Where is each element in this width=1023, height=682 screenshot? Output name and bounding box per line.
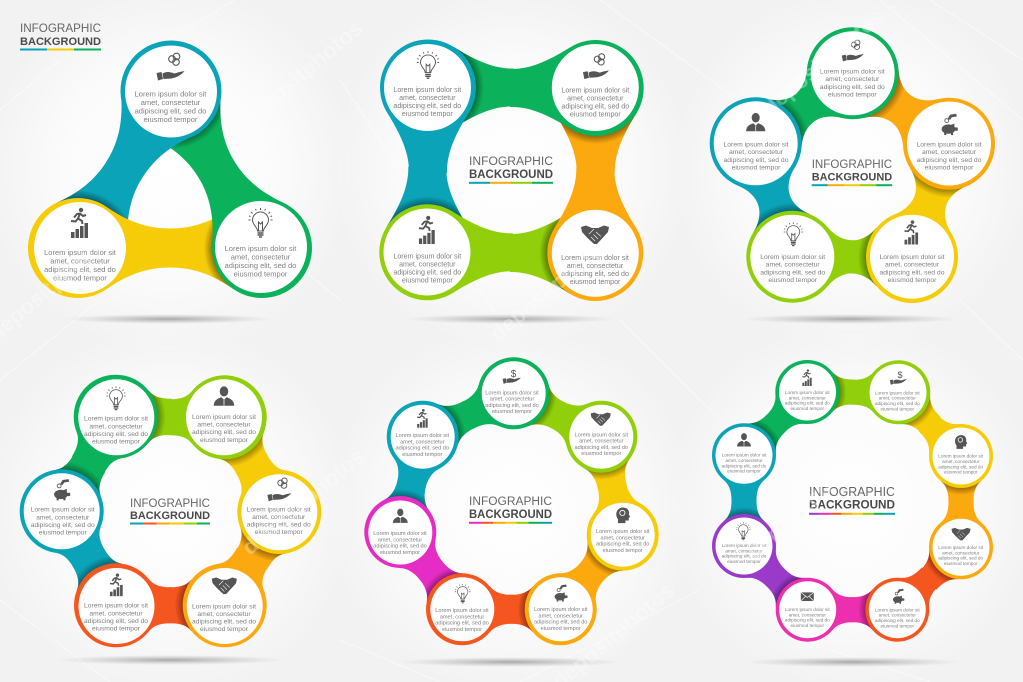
text: upper right circle: amet, consectetur <box>579 439 624 445</box>
coloured rings <box>28 40 312 298</box>
text: left circle: eiusmod tempor <box>53 274 107 282</box>
icon: runner on bars <box>802 369 812 386</box>
coloured rings <box>710 27 995 303</box>
text: top right circle: eiusmod tempor <box>200 437 249 444</box>
step: left circle <box>34 202 126 294</box>
text: top left circle: adipiscing elit, sed do <box>785 401 830 406</box>
text: top circle: adipiscing elit, sed do <box>820 84 885 91</box>
connectors entering the next circle <box>57 95 253 289</box>
text: bottom right circle: amet, consectetur <box>879 613 916 618</box>
text: top left circle: eiusmod tempor <box>402 110 453 118</box>
panel: seven step diagram <box>364 357 659 667</box>
text: lower left circle: eiusmod tempor <box>442 627 482 633</box>
text: top left circle: eiusmod tempor <box>92 438 141 446</box>
coloured rings <box>379 40 644 301</box>
coloured rings <box>364 357 659 645</box>
step: top right circle <box>186 379 262 455</box>
text: top circle: adipiscing elit, sed do <box>485 403 539 409</box>
text: lower left circle: amet, consectetur <box>725 548 763 553</box>
centre title: INFOGRAPHIC <box>809 485 895 499</box>
icon: runner on bars <box>904 220 918 244</box>
text: right circle: amet, consectetur <box>922 149 977 156</box>
step: right circle <box>591 503 655 567</box>
centre title: INFOGRAPHIC <box>130 496 210 510</box>
text: bottom right circle: Lorem ipsum dolor sit <box>880 254 945 261</box>
text: top left circle: Lorem ipsum dolor sit <box>84 416 148 423</box>
floor shadow <box>405 314 615 324</box>
text: top circle: Lorem ipsum dolor sit <box>485 390 539 396</box>
text: upper left circle: eiusmod tempor <box>727 469 761 474</box>
text: top left circle: adipiscing elit, sed do <box>393 102 461 110</box>
text: top left circle: amet, consectetur <box>399 94 456 102</box>
floor shadow <box>63 314 273 324</box>
text: right circle: eiusmod tempor <box>603 548 643 554</box>
text: bottom left circle: amet, consectetur <box>766 262 820 269</box>
step: top right circle <box>552 44 639 131</box>
step: bottom right circle <box>552 210 639 297</box>
text: top right circle: Lorem ipsum dolor sit <box>875 390 920 395</box>
icon: head with gear <box>955 435 967 449</box>
text: top left circle: amet, consectetur <box>789 395 826 400</box>
text: right circle: eiusmod tempor <box>255 529 303 536</box>
text: bottom left circle: eiusmod tempor <box>402 276 453 284</box>
text: left circle: Lorem ipsum dolor sit <box>724 141 789 148</box>
icon: runner on bars <box>419 216 435 244</box>
text: bottom right circle: Lorem ipsum dolor sit <box>561 254 629 262</box>
icon: handshake <box>951 528 971 540</box>
text: bottom left circle: adipiscing elit, sed do <box>84 618 148 625</box>
text: right circle: eiusmod tempor <box>234 270 288 278</box>
step: left circle <box>24 473 100 549</box>
text: left circle: Lorem ipsum dolor sit <box>44 248 117 257</box>
text: left circle: amet, consectetur <box>378 537 422 543</box>
floor shadow <box>55 655 285 665</box>
text: upper right circle: adipiscing elit, sed do <box>575 445 628 451</box>
text: bottom left circle: amet, consectetur <box>399 260 456 268</box>
text: upper left circle: adipiscing elit, sed do <box>722 463 767 468</box>
text: right circle: adipiscing elit, sed do <box>247 522 311 529</box>
text: bottom left circle: Lorem ipsum dolor sit <box>785 607 830 612</box>
coloured rings <box>20 375 321 647</box>
centre title: BACKGROUND <box>469 168 553 181</box>
icon: light bulb <box>106 386 126 410</box>
text: lower right circle: eiusmod tempor <box>944 561 978 566</box>
icon: runner on bars <box>110 574 123 596</box>
step: top left circle <box>384 44 471 131</box>
text: bottom right circle: eiusmod tempor <box>880 623 915 628</box>
step: upper right circle <box>932 428 990 484</box>
text: top right circle: amet, consectetur <box>879 396 916 401</box>
icon: hand with coins <box>156 53 184 80</box>
text: right circle: amet, consectetur <box>231 252 291 262</box>
title <box>20 21 101 50</box>
centre title: BACKGROUND <box>130 510 210 522</box>
step: left circle <box>714 101 798 185</box>
text: top circle: Lorem ipsum dolor sit <box>135 90 207 98</box>
text: bottom left circle: amet, consectetur <box>89 610 143 617</box>
text: left circle: amet, consectetur <box>50 256 110 266</box>
centre title <box>812 157 893 186</box>
floor shadow <box>745 657 961 667</box>
panel: five step diagram <box>710 27 995 324</box>
text: lower right circle: Lorem ipsum dolor sit <box>534 607 588 613</box>
watermark: depositphotos <box>757 3 889 120</box>
text: upper right circle: Lorem ipsum dolor sit <box>575 432 628 438</box>
text: bottom right circle: amet, consectetur <box>567 262 624 270</box>
connectors leaving each circle <box>56 391 285 631</box>
step: bottom right circle <box>187 568 263 644</box>
text: top left circle: Lorem ipsum dolor sit <box>785 390 830 395</box>
text: bottom right circle: Lorem ipsum dolor sit <box>875 607 920 612</box>
connectors leaving each circle <box>738 70 959 286</box>
icon: light bulb <box>455 584 470 603</box>
step: lower right circle <box>932 519 990 576</box>
text: top right circle: adipiscing elit, sed do <box>561 102 629 110</box>
text: top left circle: Lorem ipsum dolor sit <box>393 86 461 94</box>
icon: hand with dollar: $ <box>897 370 903 380</box>
icon: businessman <box>393 509 408 523</box>
text: top right circle: eiusmod tempor <box>880 406 915 411</box>
watermark: depositphotos <box>235 15 367 132</box>
centre title <box>469 154 553 184</box>
text: top circle: amet, consectetur <box>490 397 534 403</box>
icon: light bulb <box>417 51 439 78</box>
text: top left circle: eiusmod tempor <box>790 406 825 411</box>
text: right circle: adipiscing elit, sed do <box>916 157 982 164</box>
text: left circle: adipiscing elit, sed do <box>31 522 95 529</box>
text: left circle: adipiscing elit, sed do <box>724 157 789 164</box>
text: top right circle: amet, consectetur <box>197 422 251 429</box>
text: lower left circle: adipiscing elit, sed do <box>722 554 767 559</box>
icon: hand with dollar: $ <box>511 369 517 380</box>
icon: runner on bars <box>417 409 428 428</box>
text: top circle: eiusmod tempor <box>828 92 877 98</box>
text: upper left circle: Lorem ipsum dolor sit <box>396 433 449 439</box>
step: top circle <box>811 31 895 115</box>
text: top left circle: amet, consectetur <box>89 423 143 430</box>
icon: light bulb <box>248 208 272 237</box>
text: bottom left circle: Lorem ipsum dolor sit <box>84 603 148 610</box>
text: bottom right circle: eiusmod tempor <box>570 278 621 286</box>
text: top circle: adipiscing elit, sed do <box>135 106 206 116</box>
step: bottom right circle <box>869 581 926 638</box>
connectors entering the next circle <box>723 371 982 630</box>
step: right circle <box>215 201 307 293</box>
icon: businessman <box>214 386 234 406</box>
step: lower left circle <box>430 577 494 641</box>
icon: hand with coins <box>583 54 609 79</box>
connectors entering the next circle <box>56 391 285 631</box>
icon: businessman <box>746 113 765 131</box>
text: right circle: Lorem ipsum dolor sit <box>225 244 297 253</box>
text: left circle: adipiscing elit, sed do <box>44 265 116 274</box>
text: bottom right circle: adipiscing elit, sed do <box>880 269 945 276</box>
text: right circle: amet, consectetur <box>252 514 306 521</box>
icon: envelope <box>801 592 814 601</box>
step: top circle <box>482 361 546 425</box>
text: top right circle: eiusmod tempor <box>570 110 621 118</box>
floor shadow <box>742 314 958 324</box>
text: lower left circle: Lorem ipsum dolor sit <box>435 608 489 614</box>
centre title: INFOGRAPHIC <box>469 154 553 168</box>
icon: light bulb <box>784 222 803 246</box>
icon: light bulb <box>736 522 750 540</box>
step: bottom left circle <box>750 215 834 299</box>
step: left circle <box>368 500 432 564</box>
text: lower right circle: adipiscing elit, sed do <box>534 620 587 626</box>
text: upper right circle: eiusmod tempor <box>944 470 978 475</box>
centre title: BACKGROUND <box>809 498 895 512</box>
icon: businessman <box>737 433 751 446</box>
text: bottom right circle: eiusmod tempor <box>200 626 249 633</box>
floor shadow <box>398 657 622 667</box>
text: left circle: adipiscing elit, sed do <box>373 544 427 550</box>
text: top circle: Lorem ipsum dolor sit <box>820 68 885 75</box>
title: INFOGRAPHIC <box>20 21 101 35</box>
text: bottom left circle: eiusmod tempor <box>768 277 818 284</box>
text: top circle: amet, consectetur <box>825 76 880 83</box>
text: lower right circle: eiusmod tempor <box>541 626 581 632</box>
text: lower right circle: amet, consectetur <box>538 613 583 619</box>
text: lower left circle: eiusmod tempor <box>727 559 761 564</box>
text: lower right circle: amet, consectetur <box>942 550 980 555</box>
text: bottom right circle: adipiscing elit, sed do <box>561 270 629 278</box>
icon: hand with coins <box>842 40 864 61</box>
connectors leaving each circle <box>388 384 639 632</box>
watermark: depositphotos <box>237 443 369 560</box>
text: bottom left circle: adipiscing elit, sed do <box>760 269 825 276</box>
icon: piggy bank <box>893 589 904 604</box>
icon: runner on bars <box>71 208 88 238</box>
text: left circle: eiusmod tempor <box>380 550 420 556</box>
text: left circle: amet, consectetur <box>36 514 90 521</box>
connectors leaving each circle <box>88 95 283 289</box>
centre title <box>469 494 552 524</box>
text: top right circle: amet, consectetur <box>567 94 624 102</box>
text: bottom left circle: adipiscing elit, sed do <box>393 268 461 276</box>
step: right circle <box>907 102 991 186</box>
text: lower left circle: amet, consectetur <box>440 614 484 620</box>
text: left circle: Lorem ipsum dolor sit <box>373 531 427 537</box>
text: upper right circle: adipiscing elit, sed do <box>938 464 983 469</box>
text: lower left circle: Lorem ipsum dolor sit <box>722 543 767 548</box>
text: bottom right circle: amet, consectetur <box>197 611 251 618</box>
text: top right circle: adipiscing elit, sed do <box>192 429 256 436</box>
text: left circle: eiusmod tempor <box>39 530 87 536</box>
icon: handshake <box>212 577 237 594</box>
step: bottom left circle <box>78 568 154 644</box>
text: left circle: Lorem ipsum dolor sit <box>31 507 95 514</box>
text: top right circle: adipiscing elit, sed do <box>875 401 920 406</box>
text: bottom left circle: adipiscing elit, sed do <box>785 618 830 623</box>
text: upper right circle: eiusmod tempor <box>581 451 621 457</box>
connectors entering the next circle <box>745 70 966 287</box>
icon: piggy bank <box>555 585 568 602</box>
text: right circle: adipiscing elit, sed do <box>596 542 649 548</box>
text: upper left circle: amet, consectetur <box>400 439 445 445</box>
connectors entering the next circle <box>387 47 636 294</box>
panel: three step diagram <box>20 21 312 324</box>
centre title <box>809 485 895 515</box>
step: upper left circle <box>716 427 772 484</box>
text: top circle: amet, consectetur <box>141 98 201 107</box>
text: top circle: eiusmod tempor <box>144 115 198 124</box>
icon: handshake <box>581 226 609 244</box>
connectors entering the next circle <box>384 385 635 632</box>
centre title <box>130 496 210 524</box>
text: right circle: Lorem ipsum dolor sit <box>247 506 311 513</box>
icon: handshake <box>591 412 611 426</box>
text: lower left circle: adipiscing elit, sed do <box>435 621 489 627</box>
watermark: depositphotos <box>742 444 871 564</box>
step: top circle <box>125 46 217 138</box>
centre title: BACKGROUND <box>469 508 552 521</box>
centre title: INFOGRAPHIC <box>812 157 893 171</box>
step: top right circle <box>870 364 926 421</box>
text: right circle: amet, consectetur <box>600 535 645 541</box>
text: upper left circle: Lorem ipsum dolor sit <box>722 453 767 458</box>
text: lower right circle: Lorem ipsum dolor sit <box>938 545 984 550</box>
text: bottom right circle: adipiscing elit, sed do <box>192 619 256 626</box>
connectors leaving each circle <box>387 47 636 293</box>
text: upper right circle: amet, consectetur <box>942 459 980 464</box>
icon: head with gear <box>616 508 630 523</box>
text: bottom right circle: Lorem ipsum dolor sit <box>192 603 256 610</box>
step: top left circle <box>78 379 154 455</box>
panel: six step diagram <box>20 375 321 665</box>
panel: four step diagram <box>379 40 644 324</box>
icon: piggy bank <box>54 479 70 500</box>
text: upper left circle: adipiscing elit, sed do <box>396 446 449 452</box>
text: bottom left circle: eiusmod tempor <box>790 623 825 628</box>
centre title: INFOGRAPHIC <box>469 494 552 508</box>
step: bottom left circle <box>384 208 470 296</box>
text: bottom right circle: eiusmod tempor <box>888 277 937 284</box>
text: right circle: eiusmod tempor <box>925 164 974 172</box>
text: bottom right circle: adipiscing elit, sed do <box>875 618 920 623</box>
panel: eight step diagram <box>712 360 993 667</box>
text: bottom left circle: Lorem ipsum dolor sit <box>393 252 461 260</box>
step: lower left circle <box>716 518 772 574</box>
text: top right circle: Lorem ipsum dolor sit <box>192 414 256 421</box>
text: left circle: amet, consectetur <box>729 149 784 156</box>
text: top left circle: adipiscing elit, sed do <box>84 431 148 438</box>
text: right circle: Lorem ipsum dolor sit <box>596 529 650 535</box>
step: upper right circle <box>569 405 633 469</box>
step: top left circle <box>779 364 836 420</box>
connectors leaving each circle <box>723 372 982 630</box>
text: right circle: adipiscing elit, sed do <box>225 261 296 270</box>
text: upper left circle: eiusmod tempor <box>402 452 442 458</box>
text: bottom left circle: eiusmod tempor <box>92 626 141 632</box>
text: right circle: Lorem ipsum dolor sit <box>917 141 982 148</box>
text: bottom left circle: Lorem ipsum dolor sit <box>760 254 825 261</box>
coloured rings <box>712 360 993 642</box>
icon: hand with coins <box>267 478 291 501</box>
text: lower right circle: adipiscing elit, sed do <box>938 556 983 561</box>
watermark: depositphotos <box>485 229 617 346</box>
step: right circle <box>241 474 317 550</box>
text: bottom right circle: amet, consectetur <box>885 262 940 269</box>
title: BACKGROUND <box>20 36 101 48</box>
text: upper left circle: amet, consectetur <box>725 458 763 463</box>
step: lower right circle <box>529 577 593 641</box>
text: top circle: eiusmod tempor <box>492 409 532 415</box>
centre title: BACKGROUND <box>812 172 892 184</box>
icon: piggy bank <box>942 114 958 135</box>
text: upper right circle: Lorem ipsum dolor sit <box>938 454 984 459</box>
step: bottom right circle <box>870 215 954 299</box>
text: top right circle: Lorem ipsum dolor sit <box>561 86 629 94</box>
step: bottom left circle <box>779 581 836 638</box>
text: left circle: eiusmod tempor <box>732 164 781 172</box>
step: upper left circle <box>391 405 455 469</box>
text: bottom left circle: amet, consectetur <box>789 612 826 617</box>
